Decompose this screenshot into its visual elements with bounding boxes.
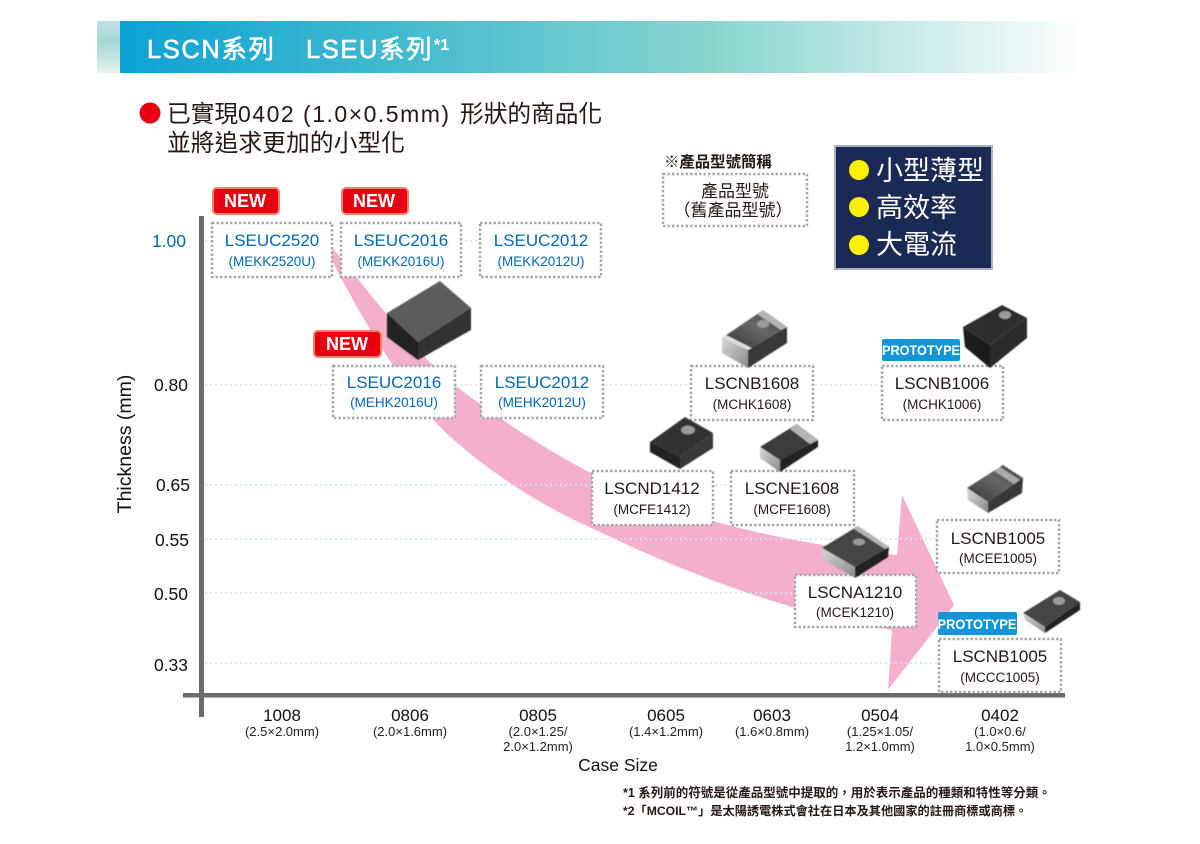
- y axis: [199, 216, 204, 717]
- icon: LSCNB1005 lower chip: [1023, 590, 1080, 633]
- pink trend arrow: [318, 232, 954, 690]
- y tick labels: 0.65: [156, 475, 190, 495]
- header title: LSCN系列: [147, 36, 276, 64]
- label: LSCNB1005 upper: LSCNB1005: [951, 529, 1045, 548]
- x axis labels: (2.0×1.25/: [509, 724, 568, 739]
- x axis labels: 0806: [391, 706, 429, 725]
- NEW badge 2: NEW: [353, 191, 395, 211]
- y tick labels: 0.33: [154, 655, 188, 675]
- label: LSCNE1608: LSCNE1608: [745, 479, 839, 498]
- x axis labels: 2.0×1.2mm): [503, 739, 573, 754]
- x axis labels: (1.4×1.2mm): [629, 724, 703, 739]
- label: LSCNB1006: (MCHK1006): [903, 397, 981, 412]
- label: LSEUC2012 top: LSEUC2012: [494, 231, 588, 250]
- x axis labels: (2.0×1.6mm): [373, 724, 447, 739]
- icon: LSCNE1608 chip: [760, 424, 818, 472]
- label: LSEUC2520: (MEKK2520U): [228, 254, 316, 269]
- label: LSEUC2016 mid: (MEHK2016U): [350, 395, 438, 410]
- NEW badge 1: [213, 188, 279, 214]
- x axis labels: (1.6×0.8mm): [735, 724, 809, 739]
- x axis labels: (1.25×1.05/: [847, 724, 913, 739]
- label: LSCNB1005 lower: [939, 639, 1061, 692]
- label: LSEUC2012 mid: LSEUC2012: [495, 373, 589, 392]
- label: LSCNE1608: [731, 471, 854, 525]
- legend: product name abbreviation: [663, 152, 807, 226]
- label: LSCNA1210: (MCEK1210): [816, 605, 894, 620]
- label: LSEUC2012 mid: [481, 366, 603, 418]
- label: LSCNA1210: LSCNA1210: [808, 583, 902, 602]
- red bullet headline: 形狀的商品化: [460, 101, 602, 128]
- header title: *1: [434, 37, 449, 54]
- x axis labels: [245, 706, 1035, 754]
- icon: LSCND1412 chip: [650, 417, 713, 469]
- label: LSEUC2012 top: [480, 223, 601, 277]
- x axis labels: (2.5×2.0mm): [245, 724, 319, 739]
- label: LSCND1412: (MCFE1412): [613, 502, 691, 517]
- NEW badge 3: NEW: [326, 334, 368, 354]
- label: LSEUC2520: LSEUC2520: [225, 231, 319, 250]
- x axis labels: 0402: [981, 706, 1019, 725]
- x axis title: Case Size: [578, 755, 658, 775]
- grid lines: [205, 241, 939, 663]
- header title: [147, 36, 449, 64]
- y tick labels: 1.00: [152, 231, 186, 251]
- label: LSEUC2016 top: LSEUC2016: [354, 231, 448, 250]
- label: LSCNB1608: [691, 366, 813, 420]
- x axis labels: (1.0×0.6/: [974, 724, 1026, 739]
- feature panel: 小型薄型: [876, 156, 984, 186]
- header title: LSEU系列: [306, 36, 433, 64]
- feature panel: [835, 146, 992, 269]
- footnotes: *1 系列前的符號是從產品型號中提取的，用於表示產品的種類和特性等分類。: [623, 785, 1051, 800]
- y tick labels: 0.50: [154, 584, 188, 604]
- prototype badge 2: PROTOTYPE: [938, 616, 1016, 632]
- label: LSCNB1608: LSCNB1608: [705, 374, 799, 393]
- icon: LSCNB1006 chip: [963, 305, 1027, 368]
- label: LSEUC2016 top: [341, 223, 461, 277]
- x axis labels: 0504: [861, 706, 899, 725]
- x axis labels: 0603: [753, 706, 791, 725]
- x axis labels: 1008: [263, 706, 301, 725]
- label: LSEUC2012 top: (MEKK2012U): [497, 254, 585, 269]
- x axis labels: 0805: [519, 706, 557, 725]
- y axis title: Thickness (mm): [114, 375, 136, 513]
- label: LSEUC2520: [212, 223, 332, 277]
- red bullet headline: [140, 101, 602, 157]
- label: LSEUC2012 mid: (MEHK2012U): [498, 395, 586, 410]
- label: LSCNB1005 lower: (MCCC1005): [960, 670, 1040, 685]
- label: LSEUC2016 mid: LSEUC2016: [347, 373, 441, 392]
- footnotes: *2「MCOIL™」是太陽誘電株式會社在日本及其他國家的註冊商標或商標。: [623, 803, 1027, 818]
- feature panel: 高效率: [876, 193, 957, 223]
- label: LSCNE1608: (MCFE1608): [753, 502, 831, 517]
- label: LSEUC2016 mid: [333, 366, 455, 418]
- x axis labels: 1.2×1.0mm): [845, 739, 915, 754]
- icon: LSCNA1210 chip: [822, 526, 889, 578]
- x axis: [183, 693, 1065, 698]
- legend: product name abbreviation: ※產品型號簡稱: [664, 152, 772, 171]
- y tick labels: [152, 231, 190, 675]
- icon: LSCNB1608 chip: [722, 310, 787, 368]
- legend: product name abbreviation: 產品型號: [701, 182, 769, 201]
- feature panel: 大電流: [876, 230, 957, 260]
- label: LSCNB1005 upper: (MCEE1005): [959, 551, 1037, 566]
- x axis labels: 0605: [647, 706, 685, 725]
- label: LSCNB1005 lower: LSCNB1005: [953, 647, 1047, 666]
- prototype badge 1: [882, 339, 960, 361]
- icon: LSCNB1005 upper chip: [967, 465, 1023, 513]
- label: LSCNB1006: [882, 366, 1003, 420]
- NEW badge 2: [342, 188, 408, 214]
- label: LSCNB1006: LSCNB1006: [895, 374, 989, 393]
- label: LSCND1412: LSCND1412: [604, 479, 700, 498]
- y tick labels: 0.55: [155, 530, 189, 550]
- NEW badge 1: NEW: [224, 191, 266, 211]
- red bullet headline: 0402 (1.0×0.5mm): [238, 101, 451, 127]
- label: LSEUC2016 top: (MEKK2016U): [357, 254, 445, 269]
- label: LSCND1412: [592, 471, 713, 525]
- label: LSCNB1005 upper: [937, 520, 1059, 573]
- x axis labels: 1.0×0.5mm): [965, 739, 1035, 754]
- prototype badge 2: [938, 612, 1017, 635]
- icon: LSEUC2016 chip: [387, 281, 471, 360]
- NEW badge 3: [314, 331, 381, 357]
- footnotes: [623, 785, 1051, 818]
- legend: product name abbreviation: （舊產品型號）: [674, 201, 792, 220]
- label: LSCNA1210: [795, 575, 916, 627]
- red bullet headline: 並將追求更加的小型化: [167, 130, 405, 157]
- header band: [97, 21, 1085, 73]
- prototype badge 1: PROTOTYPE: [882, 342, 960, 358]
- label: LSCNB1608: (MCHK1608): [713, 397, 791, 412]
- y tick labels: 0.80: [154, 375, 188, 395]
- red bullet headline: 已實現: [167, 101, 238, 128]
